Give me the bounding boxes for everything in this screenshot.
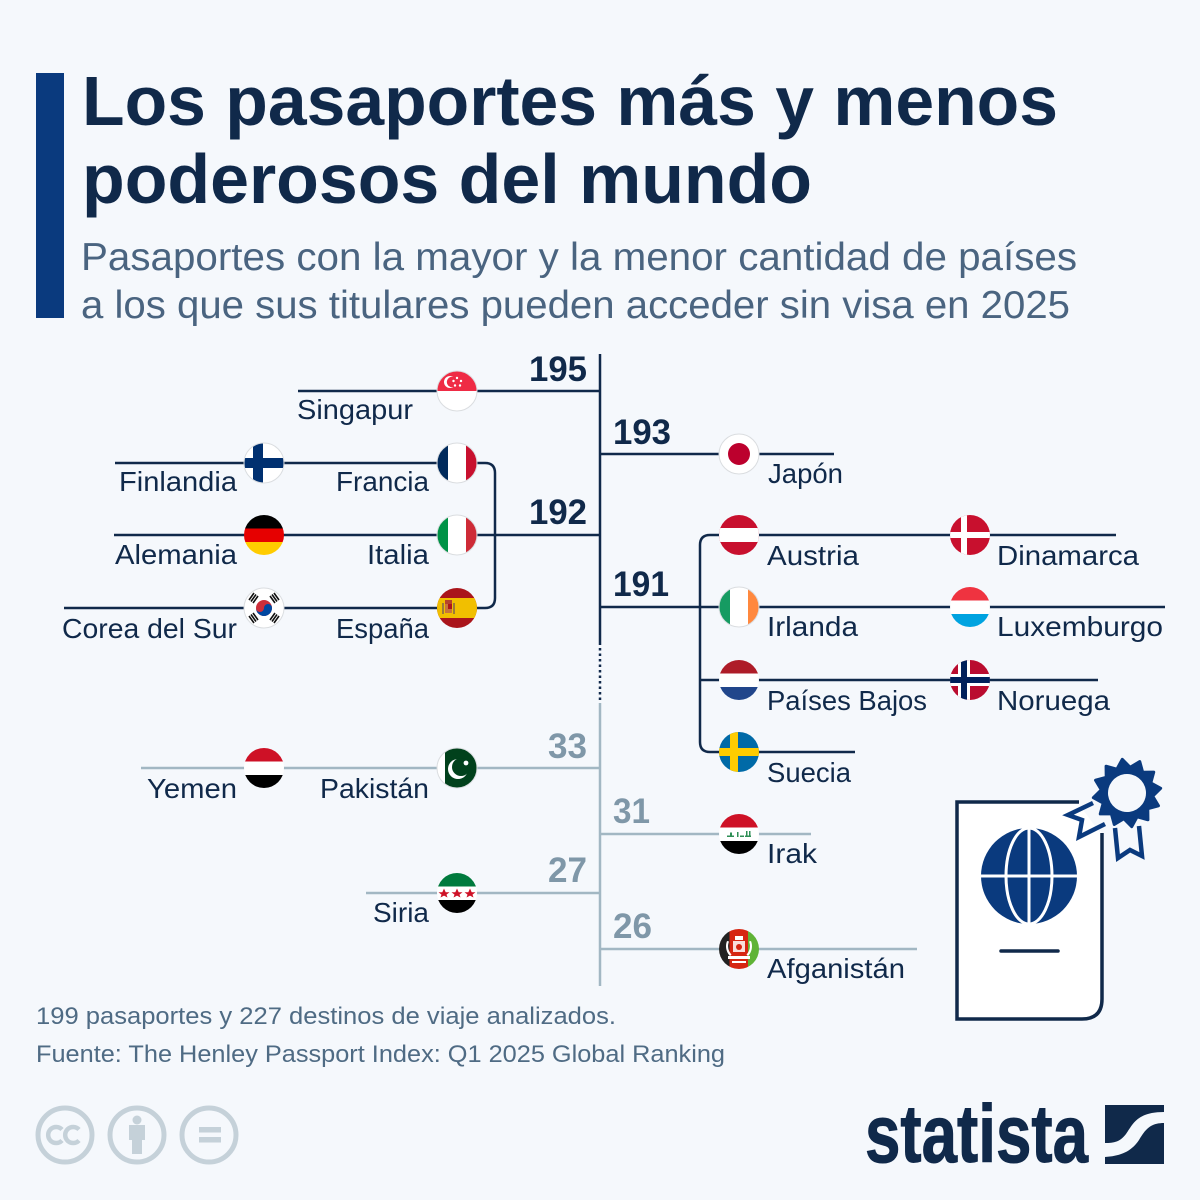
country labels: Afganistán [767,953,905,984]
rank numbers: top [529,350,671,604]
rank numbers: bottom [548,727,652,946]
country labels: Pakistán [320,773,429,804]
flag: España [437,588,477,628]
flag: Irlanda [719,587,759,627]
country labels: Francia [336,466,429,497]
subtitle: a los que sus titulares pueden acceder sin visa en 2025 [81,284,1070,327]
flag: Finlandia [244,443,284,483]
ribbon: left [1068,803,1105,837]
rank numbers: bottom: 33 [548,727,587,766]
flag: Países Bajos [719,660,759,700]
icon: creative commons [38,1108,236,1162]
icon: passport with rosette [957,755,1165,1019]
country labels: Alemania [115,539,237,570]
country labels: Singapur [297,394,413,425]
title: Los pasaportes más y menos [82,62,1058,140]
wordmark: statista [865,1089,1089,1180]
country labels: Noruega [997,685,1110,716]
rank numbers: top: 191 [613,565,669,604]
subtitle [81,236,1077,327]
rank numbers: bottom: 27 [548,851,587,890]
source note: 199 pasaportes y 227 destinos de viaje analizados. [36,1003,616,1030]
axis: break [599,648,601,703]
axis: top ranks [599,354,601,645]
connector lines: top ranks [64,391,1165,752]
country labels [62,394,1163,984]
country labels: Finlandia [119,466,237,497]
flag: Suecia [719,732,759,772]
flag: Austria [719,515,759,555]
ribbon: lower [1115,826,1142,858]
rank numbers: bottom: 26 [613,907,652,946]
chart: passport ranking tree [62,350,1165,986]
title [82,62,1058,218]
flag: Japón [719,434,759,474]
flag: Noruega [950,660,990,700]
cc [38,1108,92,1162]
flag: Luxemburgo [950,587,990,627]
country labels: Luxemburgo [997,611,1163,642]
flag: Afganistán [719,929,759,969]
connector lines: bottom ranks [141,768,917,949]
subtitle: Pasaportes con la mayor y la menor cantidad de países [81,236,1077,279]
flag: Irak [719,814,759,854]
flag: Francia [437,443,477,483]
nd [182,1108,236,1162]
flag: Singapur [437,371,477,411]
rank numbers: bottom: 31 [613,792,650,831]
country labels: Japón [768,458,843,489]
country labels: Italia [367,539,429,570]
logo: statista [865,1089,1164,1180]
country labels: Corea del Sur [62,613,237,644]
country labels: Irlanda [767,611,858,642]
flag: Italia [437,515,477,555]
title: poderosos del mundo [82,140,812,218]
axis: bottom ranks [599,703,601,986]
globe [981,828,1077,924]
country labels: Irak [767,838,818,869]
country labels: Yemen [147,773,237,804]
by [110,1108,164,1162]
logo mark [1105,1105,1164,1164]
rank numbers: top: 193 [613,413,671,452]
country labels: Suecia [767,757,851,788]
country labels: Siria [373,897,429,928]
rosette [1089,755,1165,831]
flag: Siria [437,873,477,913]
flag: Pakistán [437,748,477,788]
country labels: España [336,613,429,644]
rank numbers: top: 195 [529,350,587,389]
flag: Yemen [244,748,284,788]
country labels: Austria [767,540,859,571]
source note [36,1003,725,1068]
passport white fill corner [1079,804,1100,833]
flag: Alemania [244,515,284,555]
title accent bar [36,73,64,318]
rank numbers: top: 192 [529,493,587,532]
country labels: Dinamarca [997,540,1139,571]
passport cover [957,802,1102,1019]
source note: Fuente: The Henley Passport Index: Q1 2025 Global Ranking [36,1041,725,1068]
passport dash [1001,949,1058,953]
country labels: Países Bajos [767,685,927,716]
flag: Dinamarca [950,515,990,555]
flag: Corea del Sur [244,588,284,628]
